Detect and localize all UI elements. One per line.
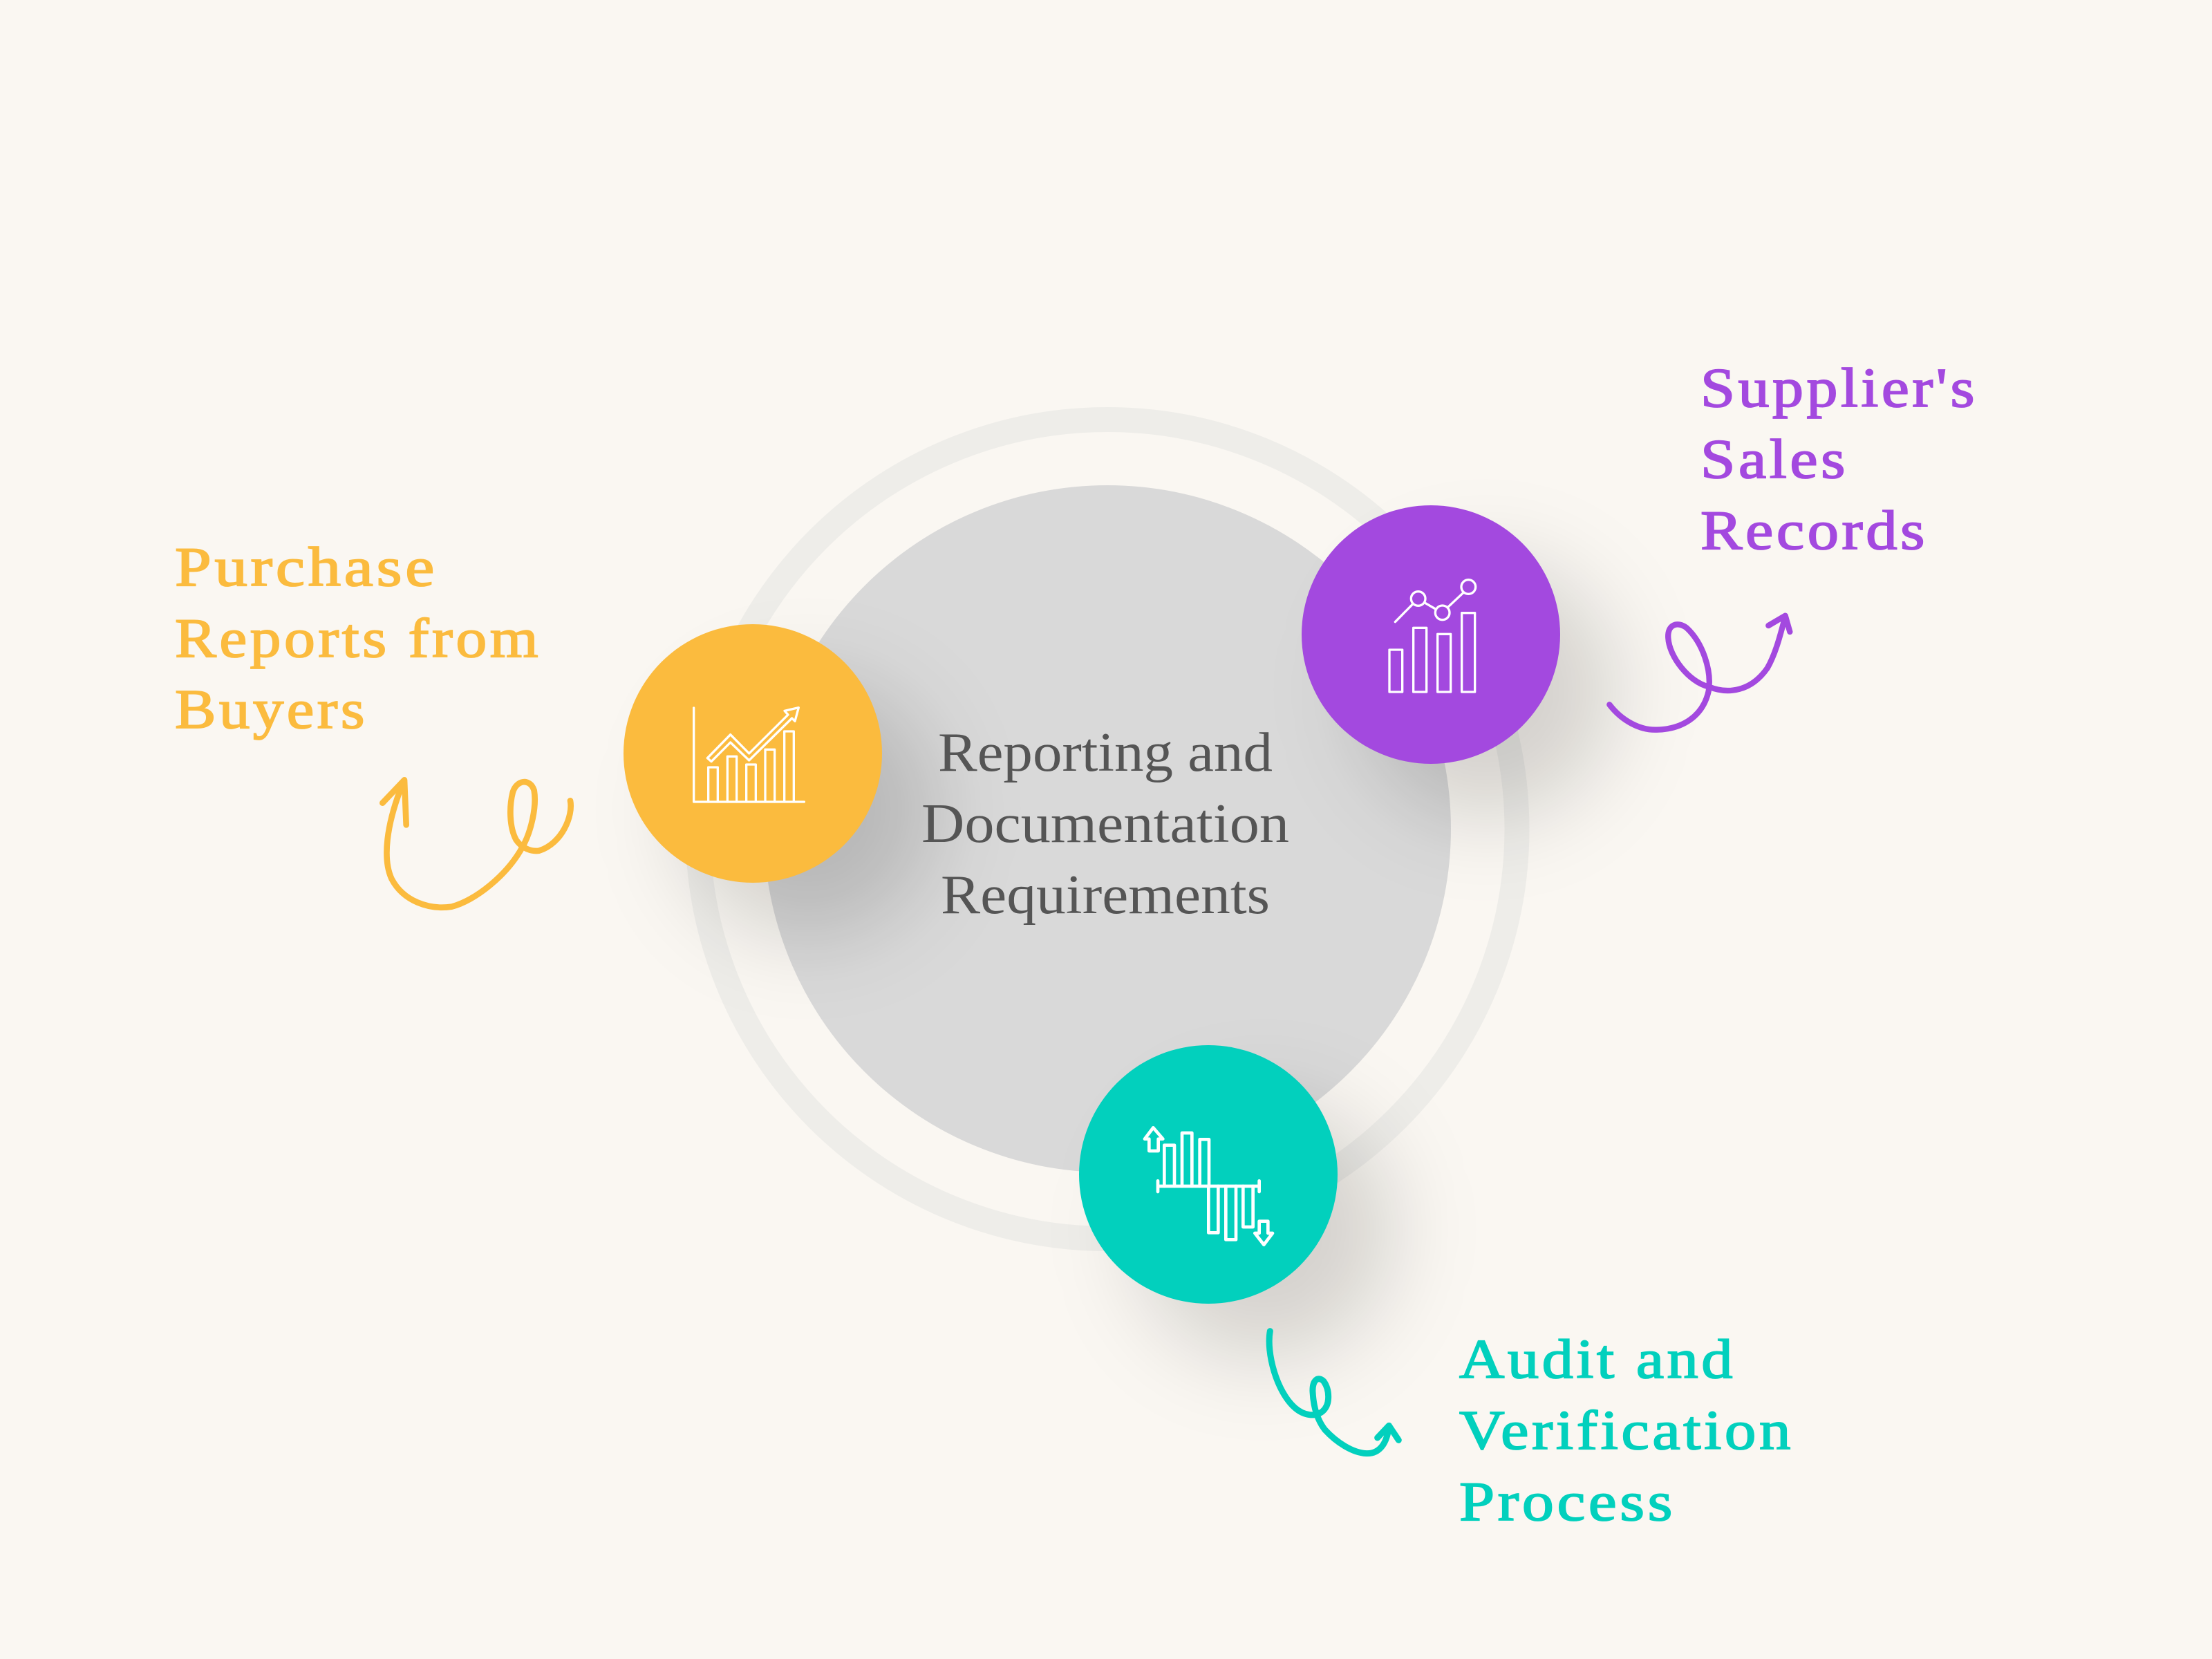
arrow: teal squiggle xyxy=(1269,1331,1398,1454)
icon: positive and negative bars xyxy=(1145,1127,1273,1245)
shadow: yellow node xyxy=(679,679,937,938)
icon: bar chart with line graph xyxy=(1389,580,1476,692)
arrow: yellow squiggle xyxy=(382,780,571,908)
label: audit and verification process: Process xyxy=(1459,1472,1676,1533)
shadow: teal node xyxy=(1134,1100,1393,1359)
label: supplier's sales records xyxy=(1700,358,1978,561)
label: audit and verification process xyxy=(1459,1329,1794,1533)
central title: Requirements xyxy=(941,865,1270,926)
central title: Documentation xyxy=(921,794,1289,854)
label: audit and verification process: Verification xyxy=(1459,1400,1794,1461)
label: supplier's sales records: Records xyxy=(1700,500,1928,561)
arrow: purple squiggle xyxy=(1609,616,1790,730)
central circle xyxy=(764,485,1451,1172)
central title xyxy=(921,722,1289,926)
node: purchase reports xyxy=(624,624,882,883)
label: audit and verification process: Audit and xyxy=(1459,1329,1736,1390)
central title: Reporting and xyxy=(938,722,1273,783)
node: audit and verification xyxy=(1079,1045,1338,1304)
label: purchase reports from buyers xyxy=(175,537,541,740)
label: purchase reports from buyers: Reports from xyxy=(175,608,541,669)
shadow: purple node xyxy=(1357,561,1615,819)
label: purchase reports from buyers: Purchase xyxy=(175,537,438,598)
label: purchase reports from buyers: Buyers xyxy=(175,679,368,740)
node: supplier sales records xyxy=(1302,505,1560,764)
label: supplier's sales records: Sales xyxy=(1700,429,1848,490)
icon: rising bar chart with arrow xyxy=(694,708,804,802)
label: supplier's sales records: Supplier's xyxy=(1700,358,1978,419)
outer ring xyxy=(698,420,1517,1239)
